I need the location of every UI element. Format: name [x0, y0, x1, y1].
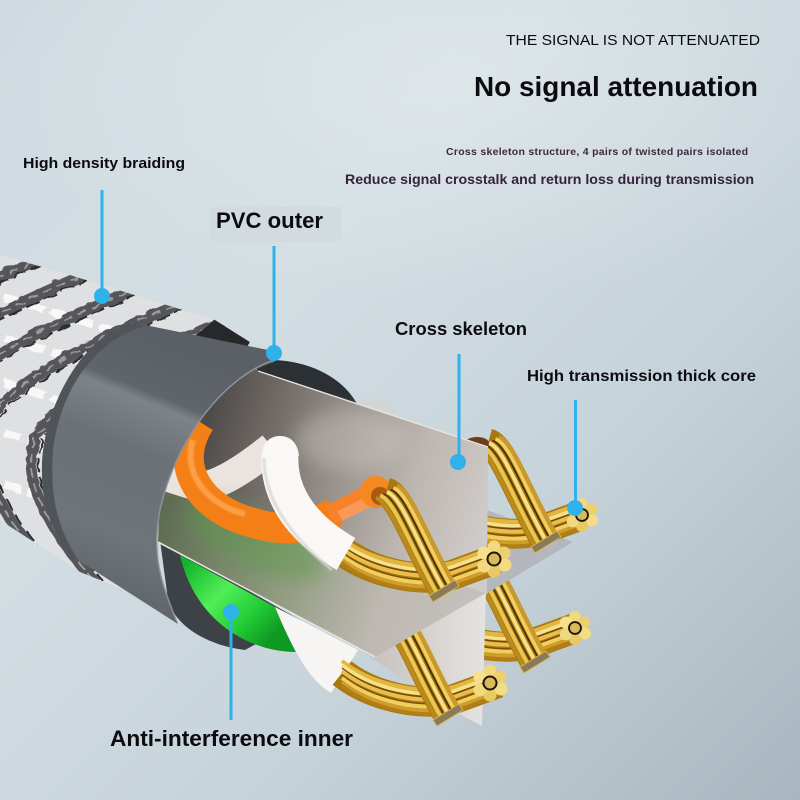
wire behind: white — [165, 447, 272, 488]
callout: high transmission thick core: High transmission thick core — [527, 368, 756, 385]
eyebrow caption: THE SIGNAL IS NOT ATTENUATED — [506, 32, 760, 49]
jacket inner wall — [160, 360, 357, 650]
front upper core — [340, 537, 512, 590]
callout: anti-interference inner — [110, 604, 353, 751]
skeleton rear plate — [486, 510, 573, 594]
callout: high transmission thick core — [527, 368, 756, 516]
white wire stub — [350, 398, 394, 426]
callout: PVC outer — [210, 207, 341, 361]
lower vertical plate — [360, 592, 486, 726]
description line 2: Reduce signal crosstalk and return loss during transmission — [345, 171, 754, 187]
header: signal statement — [345, 32, 760, 187]
braided sleeve — [0, 255, 250, 590]
callout: PVC outer: PVC outer — [216, 208, 323, 233]
front upper diagonal strand — [376, 486, 459, 602]
horizontal plate — [158, 483, 486, 657]
rear upper conductor — [426, 437, 598, 553]
upper vertical plate — [160, 368, 488, 594]
front lower conductor — [342, 610, 508, 726]
callout: high density braiding — [23, 155, 185, 304]
callout: high density braiding: High density braiding — [23, 155, 185, 172]
green wire — [180, 555, 296, 652]
white wire front — [262, 436, 346, 570]
callout: cross skeleton — [395, 319, 527, 470]
main heading: No signal attenuation — [474, 71, 758, 102]
jacket sleeve — [42, 323, 275, 624]
description line 1: Cross skeleton structure, 4 pairs of twisted pairs isolated — [446, 146, 748, 158]
callout: cross skeleton: Cross skeleton — [395, 319, 527, 339]
rear lower conductor — [419, 557, 591, 673]
callout: anti-interference inner: Anti-interference inner — [110, 726, 353, 751]
orange wire — [189, 422, 392, 528]
white wire lower — [275, 607, 358, 693]
